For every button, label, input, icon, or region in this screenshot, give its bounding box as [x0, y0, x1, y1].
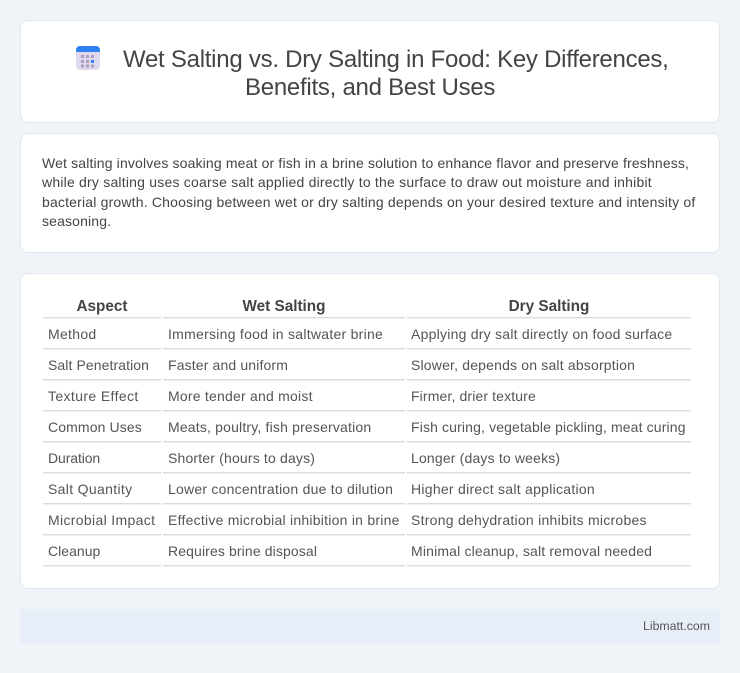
footer credit: Libmatt.com — [643, 619, 710, 633]
row: method: Method — [48, 326, 96, 342]
row: salt quantity: Lower concentration due to dilution — [168, 481, 393, 497]
intro paragraph: seasoning. — [42, 213, 111, 229]
row: method — [43, 326, 691, 350]
row: salt quantity: Salt Quantity — [48, 481, 132, 497]
header row: Aspect — [76, 298, 128, 315]
title text: Wet Salting vs. Dry Salting in Food: Key Differences, — [123, 46, 669, 73]
row: common uses: Common Uses — [48, 419, 142, 435]
row: common uses: Meats, poultry, fish preservation — [168, 419, 371, 435]
row: microbial impact: Strong dehydration inhibits microbes — [411, 512, 647, 528]
intro panel — [20, 133, 720, 253]
row: common uses: Fish curing, vegetable pickling, meat curing — [411, 419, 686, 435]
row: microbial impact: Microbial Impact — [48, 512, 155, 528]
row: duration: Longer (days to weeks) — [411, 450, 560, 466]
title text — [123, 46, 669, 101]
row: salt penetration: Salt Penetration — [48, 357, 149, 373]
row: salt penetration — [43, 357, 691, 381]
row: salt penetration: Slower, depends on salt absorption — [411, 357, 635, 373]
title panel — [20, 20, 720, 123]
header row: Dry Salting — [509, 298, 589, 315]
row: cleanup — [43, 543, 691, 567]
intro paragraph: while dry salting uses coarse salt applied directly to the surface to draw out moisture and inhibit — [42, 174, 652, 190]
row: common uses — [43, 419, 691, 443]
intro paragraph: bacterial growth. Choosing between wet or dry salting depends on your desired texture and intensity of — [42, 194, 695, 210]
intro paragraph — [42, 155, 696, 229]
row: texture effect: Firmer, drier texture — [411, 388, 536, 404]
intro paragraph: Wet salting involves soaking meat or fish in a brine solution to enhance flavor and preserve freshness, — [42, 155, 689, 171]
row: duration — [43, 450, 691, 474]
row: microbial impact: Effective microbial inhibition in brine — [168, 512, 400, 528]
row: duration: Shorter (hours to days) — [168, 450, 315, 466]
row: texture effect: More tender and moist — [168, 388, 313, 404]
row: method: Immersing food in saltwater brine — [168, 326, 383, 342]
row: cleanup: Cleanup — [48, 543, 100, 559]
row: microbial impact — [43, 512, 691, 536]
row: duration: Duration — [48, 450, 100, 466]
row: cleanup: Requires brine disposal — [168, 543, 317, 559]
row: salt quantity: Higher direct salt application — [411, 481, 595, 497]
row: method: Applying dry salt directly on food surface — [411, 326, 672, 342]
footer bar — [20, 609, 720, 643]
row: salt penetration: Faster and uniform — [168, 357, 288, 373]
header row — [43, 298, 691, 319]
row: salt quantity — [43, 481, 691, 505]
title text: Benefits, and Best Uses — [245, 74, 495, 101]
row: cleanup: Minimal cleanup, salt removal needed — [411, 543, 652, 559]
row: texture effect — [43, 388, 691, 412]
row: texture effect: Texture Effect — [48, 388, 139, 404]
icon: calendar — [76, 46, 100, 70]
header row: Wet Salting — [242, 298, 326, 315]
table panel — [20, 273, 720, 589]
comparison table — [43, 298, 691, 567]
